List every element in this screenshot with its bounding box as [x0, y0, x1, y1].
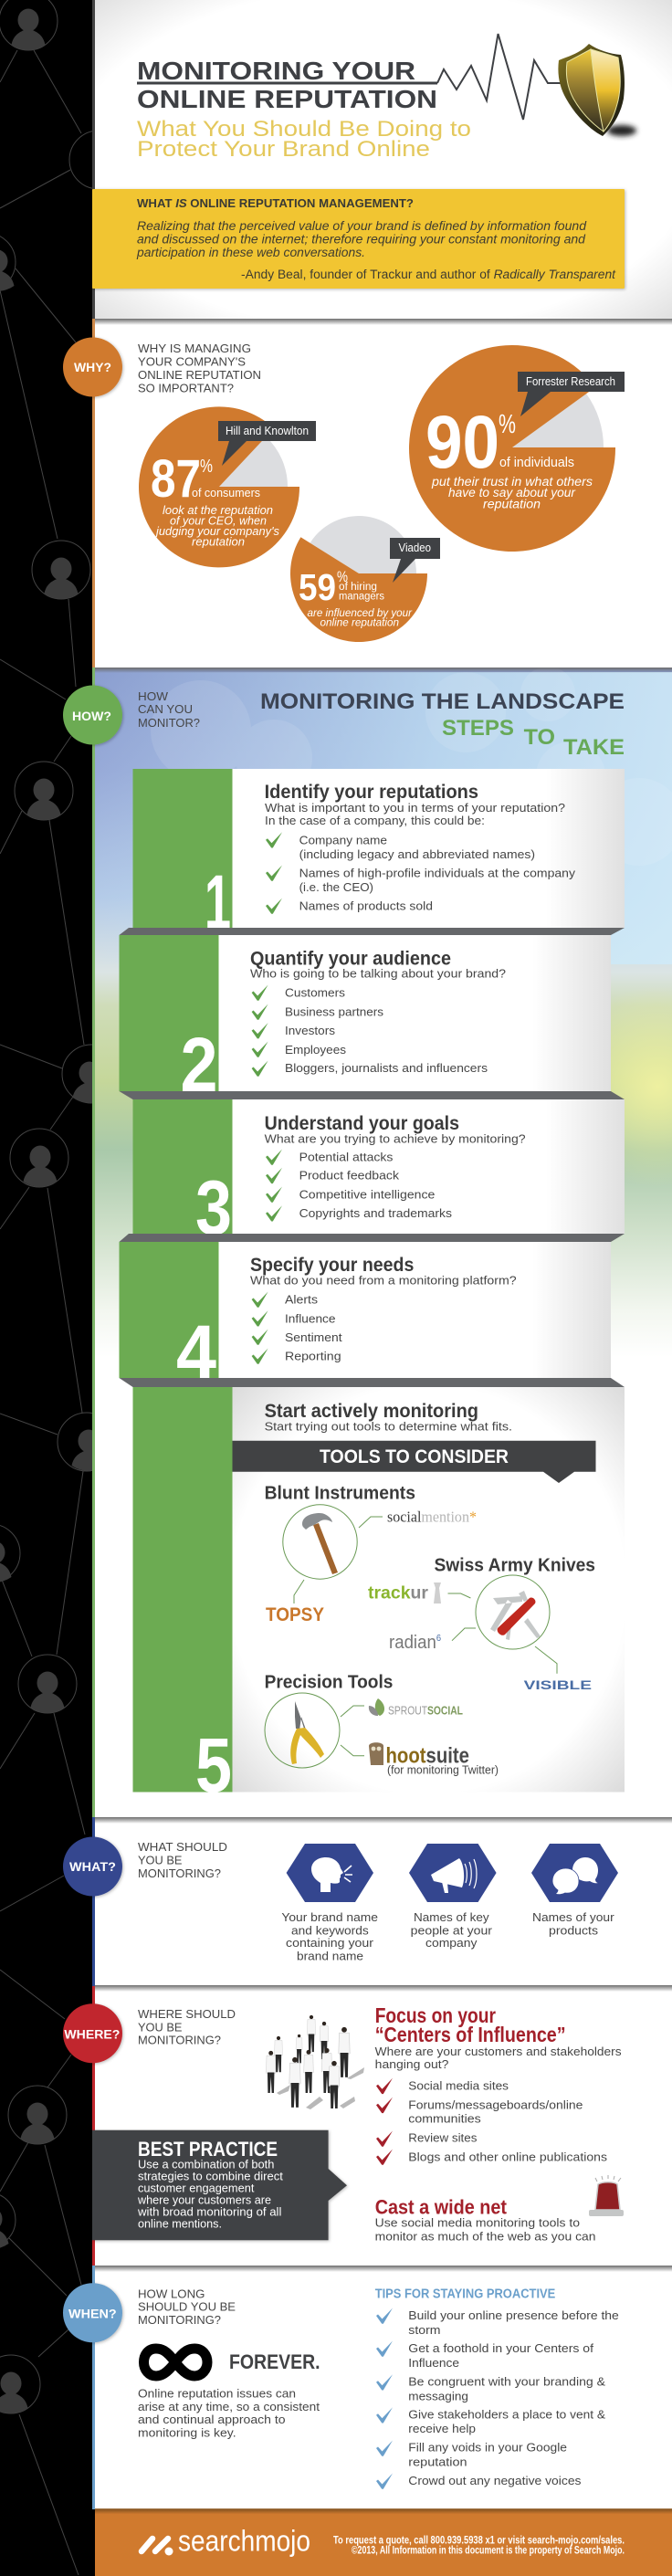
icon: infinity	[144, 2349, 207, 2376]
panel: step 3	[133, 1099, 625, 1251]
shelf 2	[119, 1091, 625, 1099]
best practice text: with broad monitoring of all	[137, 2205, 282, 2219]
checklist: centers of influence: Forums/messageboards/online	[408, 2098, 583, 2111]
pie chart: 59 percent: 59	[299, 566, 336, 608]
pie chart: 90 percent: of individuals	[499, 455, 574, 470]
number 5: 5	[195, 1722, 232, 1808]
shelf 4	[119, 1378, 625, 1387]
step 4 intro: What do you need from a monitoring platform?	[250, 1274, 517, 1288]
step 1 intro: What is important to you in terms of your reputation?	[265, 801, 565, 815]
callout: Viadeo	[390, 538, 440, 583]
checklist: tips: Get a foothold in your Centers of	[408, 2341, 593, 2355]
question text: CAN YOU	[138, 703, 193, 716]
logo: radian6: 6	[436, 1634, 441, 1644]
step 1 intro: In the case of a company, this could be:	[265, 814, 485, 827]
banner: tools to consider	[232, 1441, 595, 1483]
connector lines: blunt	[294, 1517, 383, 1603]
subtitle	[137, 117, 471, 162]
step 4 checklist: Reporting	[285, 1350, 341, 1363]
subtitle: What You Should Be Doing to	[137, 117, 471, 142]
icon: siren	[589, 2175, 624, 2216]
heading: centers of influence	[375, 2003, 566, 2046]
pie chart: 90 percent: have to say about your	[448, 486, 576, 499]
step 4 checklist: Sentiment	[285, 1330, 342, 1344]
best practice text: online mentions.	[138, 2217, 222, 2231]
logo mark	[142, 2539, 173, 2555]
badge: where: WHERE?	[64, 2027, 120, 2041]
note: for monitoring twitter: (for monitoring Twitter)	[387, 1764, 499, 1777]
panel: header	[92, 0, 672, 319]
panel: best practice	[92, 2130, 347, 2240]
heading: steps to take: TO	[524, 725, 555, 750]
cast a wide net text: Use social media monitoring tools to	[375, 2216, 580, 2230]
pie chart: 59 percent: online reputation	[320, 617, 399, 628]
checklist: tips: Influence	[408, 2356, 459, 2370]
question text: HOW	[138, 690, 168, 703]
callout: Viadeo: Viadeo	[398, 541, 431, 554]
pie chart: 59 percent: %	[337, 568, 348, 585]
logo: visible: VISIBLE	[524, 1678, 592, 1692]
question text: MONITORING?	[138, 1867, 221, 1880]
checklist: tips: messaging	[408, 2389, 468, 2403]
step 1 checklist: Names of high-profile individuals at the company	[299, 867, 576, 880]
question text: YOUR COMPANY'S	[138, 356, 246, 369]
step 1 checklist: (including legacy and abbreviated names)	[299, 847, 535, 861]
subtitle: Protect Your Brand Online	[137, 137, 430, 162]
panel: step 2	[119, 935, 611, 1108]
checklist: centers of influence	[376, 2078, 608, 2165]
heartbeat line	[437, 34, 562, 120]
heading: centers of influence: “Centers of Influence”	[375, 2023, 566, 2046]
step 4 checklist	[252, 1291, 342, 1364]
title: ONLINE REPUTATION	[137, 85, 437, 113]
intro text: hanging out?	[375, 2057, 448, 2071]
checklist: centers of influence: Blogs and other online publications	[408, 2150, 608, 2164]
connector lines: precision	[341, 1706, 364, 1756]
step 2 heading: Quantify your audience	[250, 949, 451, 970]
footer contact text	[333, 2535, 625, 2557]
sidebar: black network background	[0, 0, 128, 2576]
icon: speaking head hexagon	[287, 1844, 373, 1902]
shelf 3	[119, 1234, 625, 1242]
question text	[138, 342, 261, 394]
cast a wide net text	[375, 2216, 595, 2243]
heading: monitoring the landscape: MONITORING THE LANDSCAPE	[260, 689, 625, 714]
best practice text: where your customers are	[137, 2193, 271, 2207]
caption: products	[532, 1910, 614, 1937]
heading: steps to take	[442, 716, 625, 760]
step 3 checklist: Product feedback	[299, 1169, 400, 1183]
logo: topsy: TOPSY	[266, 1604, 324, 1625]
intro text: Where are your customers and stakeholders	[375, 2045, 622, 2058]
step 1 checklist	[266, 832, 576, 914]
heading: steps to take: TAKE	[563, 735, 625, 760]
badge: what: WHAT?	[69, 1860, 116, 1874]
step 2 checklist: Bloggers, journalists and influencers	[285, 1061, 488, 1075]
logo: trackur: trackur	[368, 1584, 429, 1603]
best practice heading: BEST PRACTICE	[138, 2138, 278, 2161]
caption: key people: Names of key	[414, 1910, 489, 1924]
panel: how section	[63, 667, 672, 1817]
question text	[138, 1841, 227, 1880]
step 2 intro: Who is going to be talking about your brand?	[250, 967, 506, 981]
badge: when	[63, 2283, 122, 2342]
panel: footer	[95, 2508, 672, 2576]
checklist: tips	[376, 2308, 619, 2489]
forever text: Online reputation issues can	[138, 2387, 296, 2401]
shelf 1	[119, 928, 625, 935]
checklist: tips: reputation	[408, 2455, 467, 2468]
title	[137, 57, 437, 113]
step 3 intro: What are you trying to achieve by monitoring?	[265, 1132, 526, 1146]
logo: sproutsocial	[369, 1698, 463, 1718]
icon: swiss army knife	[476, 1575, 550, 1649]
number 1: 1	[205, 859, 231, 945]
icon: hammer	[283, 1505, 357, 1579]
definition text: participation in these web conversations.	[136, 246, 365, 259]
pie chart: 59 percent: are influenced by your	[307, 608, 413, 619]
pie chart: 87 percent: of consumers	[192, 486, 260, 499]
step 2 checklist: Employees	[285, 1043, 347, 1057]
best practice text: Use a combination of both	[138, 2157, 274, 2171]
definition text: and discussed on the internet; therefore requiring your constant monitoring and	[137, 233, 586, 247]
number 2: 2	[181, 1022, 217, 1108]
step 3 heading: Understand your goals	[265, 1113, 459, 1134]
heading: precision tools: Precision Tools	[265, 1672, 393, 1692]
caption: brand name: Your brand name	[281, 1910, 378, 1924]
heading: cast a wide net: Cast a wide net	[375, 2195, 508, 2218]
checklist: tips: storm	[408, 2323, 440, 2337]
step 2 checklist: Investors	[285, 1024, 336, 1037]
forever text: monitoring is key.	[138, 2425, 236, 2439]
checklist: centers of influence: communities	[408, 2112, 481, 2126]
best practice text	[137, 2157, 283, 2231]
step 3 checklist: Copyrights and trademarks	[299, 1206, 453, 1220]
badge: what	[63, 1837, 122, 1896]
heading: steps to take: STEPS	[442, 716, 514, 741]
step 3 checklist: Competitive intelligence	[299, 1187, 435, 1201]
badge: how: HOW?	[72, 710, 111, 723]
checklist: tips: receive help	[408, 2422, 476, 2435]
question text: WHERE SHOULD	[138, 2008, 236, 2021]
question text	[138, 690, 200, 730]
definition heading: WHAT IS ONLINE REPUTATION MANAGEMENT?	[137, 197, 414, 210]
pie chart: 90 percent: reputation	[483, 497, 541, 511]
logo: searchmojo: searchmojo	[178, 2524, 310, 2557]
forever text	[138, 2387, 320, 2439]
panel: when section	[63, 2266, 672, 2509]
step 4 checklist: Influence	[285, 1311, 336, 1325]
step 2 checklist: Business partners	[285, 1005, 384, 1019]
question text	[138, 2008, 236, 2046]
caption: brand name: and keywords	[291, 1923, 369, 1937]
badge: why: WHY?	[74, 361, 111, 374]
panel: what section	[63, 1817, 672, 1986]
question text: MONITOR?	[138, 717, 200, 730]
forever text: and continual approach to	[138, 2413, 286, 2426]
pie chart: 87 percent: judging your company's	[154, 525, 279, 538]
banner: tools to consider: TOOLS TO CONSIDER	[320, 1446, 509, 1467]
callout: Forrester Research	[518, 372, 625, 416]
pie chart: 59 percent: managers	[339, 592, 384, 603]
step 1 intro	[265, 801, 565, 827]
heading: blunt instruments: Blunt Instruments	[265, 1484, 415, 1504]
panel: definition box	[92, 189, 625, 289]
definition text	[136, 219, 587, 259]
icon: megaphone hexagon	[409, 1844, 497, 1902]
pie chart: 59 percent	[290, 516, 440, 642]
caption: brand name: brand name	[297, 1950, 363, 1963]
step 3 checklist: Potential attacks	[299, 1150, 394, 1163]
caption: key people	[411, 1910, 493, 1950]
intro text	[375, 2045, 622, 2071]
caption: key people: people at your	[411, 1923, 493, 1937]
panel: where section	[63, 1985, 672, 2266]
step 2 checklist: Customers	[285, 986, 346, 1000]
definition text: Realizing that the perceived value of your brand is defined by information found	[137, 219, 587, 233]
logo: sproutsocial: SPROUTSOCIAL	[388, 1705, 463, 1718]
checklist: tips: Fill any voids in your Google	[408, 2441, 567, 2455]
panel: step 1	[133, 769, 625, 945]
pie chart: 90 percent: 90	[425, 401, 499, 484]
title rule	[137, 82, 437, 84]
checklist: centers of influence: Review sites	[408, 2131, 478, 2145]
step 1 checklist: (i.e. the CEO)	[299, 880, 373, 894]
checklist: centers of influence: Social media sites	[408, 2079, 509, 2093]
logo: radian6: radian	[389, 1633, 440, 1653]
step 5 heading: Start actively monitoring	[265, 1401, 478, 1422]
cast a wide net text: monitor as much of the web as you can	[375, 2229, 595, 2243]
callout: Forrester Research: Forrester Research	[526, 375, 615, 388]
callout: Hill and Knowlton: Hill and Knowlton	[226, 425, 309, 437]
panel: step 4	[119, 1242, 611, 1395]
step 5 intro: Start trying out tools to determine what fits.	[265, 1420, 512, 1434]
heading: tips: TIPS FOR STAYING PROACTIVE	[375, 2287, 556, 2302]
question text: WHAT SHOULD	[138, 1841, 227, 1854]
logo: hootsuite: hootsuite	[385, 1744, 469, 1769]
question text: MONITORING?	[138, 2314, 221, 2327]
step 1 checklist: Names of products sold	[299, 899, 433, 913]
pie chart: 90 percent: %	[499, 410, 516, 439]
badge: why	[63, 338, 122, 396]
badge: when: WHEN?	[68, 2308, 117, 2321]
heading: swiss army knives: Swiss Army Knives	[435, 1556, 595, 1576]
panel: step 5	[133, 1387, 625, 1808]
panel: why section	[63, 319, 672, 668]
caption: brand name	[281, 1910, 378, 1963]
icon: speech bubbles hexagon	[531, 1844, 618, 1902]
question text: WHY IS MANAGING	[138, 342, 251, 355]
callout: Hill and Knowlton	[218, 421, 316, 466]
title: MONITORING YOUR	[137, 57, 415, 85]
caption: products: products	[549, 1923, 599, 1937]
checklist: tips: Build your online presence before the	[408, 2308, 619, 2322]
step 2 checklist	[252, 984, 488, 1077]
forever label: FOREVER.	[229, 2350, 320, 2373]
caption: brand name: containing your	[286, 1936, 374, 1950]
connector lines: swiss	[447, 1593, 557, 1674]
step 1 heading: Identify your reputations	[265, 782, 478, 803]
checklist: tips: Be congruent with your branding &	[408, 2374, 605, 2388]
checklist: tips: Give stakeholders a place to vent &	[408, 2407, 605, 2421]
icon: shield	[558, 44, 636, 136]
question text: MONITORING?	[138, 2034, 221, 2046]
pie chart: 59 percent: of hiring	[339, 582, 377, 593]
pie chart: 87 percent	[139, 406, 316, 567]
badge: how	[63, 685, 122, 745]
checklist: tips: Crowd out any negative voices	[408, 2474, 582, 2487]
step 4 checklist: Alerts	[285, 1293, 319, 1307]
question text: YOU BE	[138, 1855, 183, 1867]
pie chart: 87 percent: reputation	[192, 535, 245, 548]
question text: SHOULD YOU BE	[138, 2301, 236, 2314]
pie chart: 90 percent: put their trust in what others	[431, 475, 593, 489]
attribution: -Andy Beal, founder of Trackur and author of Radically Transparent	[241, 268, 616, 281]
illustration: group of people	[267, 2015, 364, 2109]
pie chart: 87 percent: look at the reputation	[163, 504, 273, 517]
question text: ONLINE REPUTATION	[138, 369, 261, 382]
forever text: arise at any time, so a consistent	[138, 2400, 320, 2413]
best practice text: strategies to combine direct	[138, 2169, 283, 2182]
step 4 heading: Specify your needs	[250, 1255, 414, 1276]
heading: centers of influence: Focus on your	[375, 2003, 496, 2027]
step 1 checklist: Company name	[299, 834, 387, 847]
pie chart: 87 percent: %	[200, 457, 213, 477]
best practice text: customer engagement	[138, 2181, 255, 2194]
step 3 checklist	[266, 1149, 453, 1222]
pie chart: 90 percent	[409, 345, 625, 552]
question text	[138, 2288, 236, 2327]
question text: SO IMPORTANT?	[138, 382, 234, 394]
question text: YOU BE	[138, 2021, 183, 2034]
pie chart: 87 percent: 87	[151, 449, 201, 509]
caption: products: Names of your	[532, 1910, 614, 1924]
badge: where	[63, 2003, 122, 2063]
logo: socialmention: socialmention*	[387, 1509, 477, 1526]
number 3: 3	[195, 1165, 232, 1251]
number 4: 4	[176, 1309, 216, 1395]
icon: pliers	[265, 1693, 340, 1768]
caption: key people: company	[425, 1936, 478, 1950]
pie chart: 87 percent: of your CEO, when	[170, 515, 267, 528]
question text: HOW LONG	[138, 2288, 205, 2301]
